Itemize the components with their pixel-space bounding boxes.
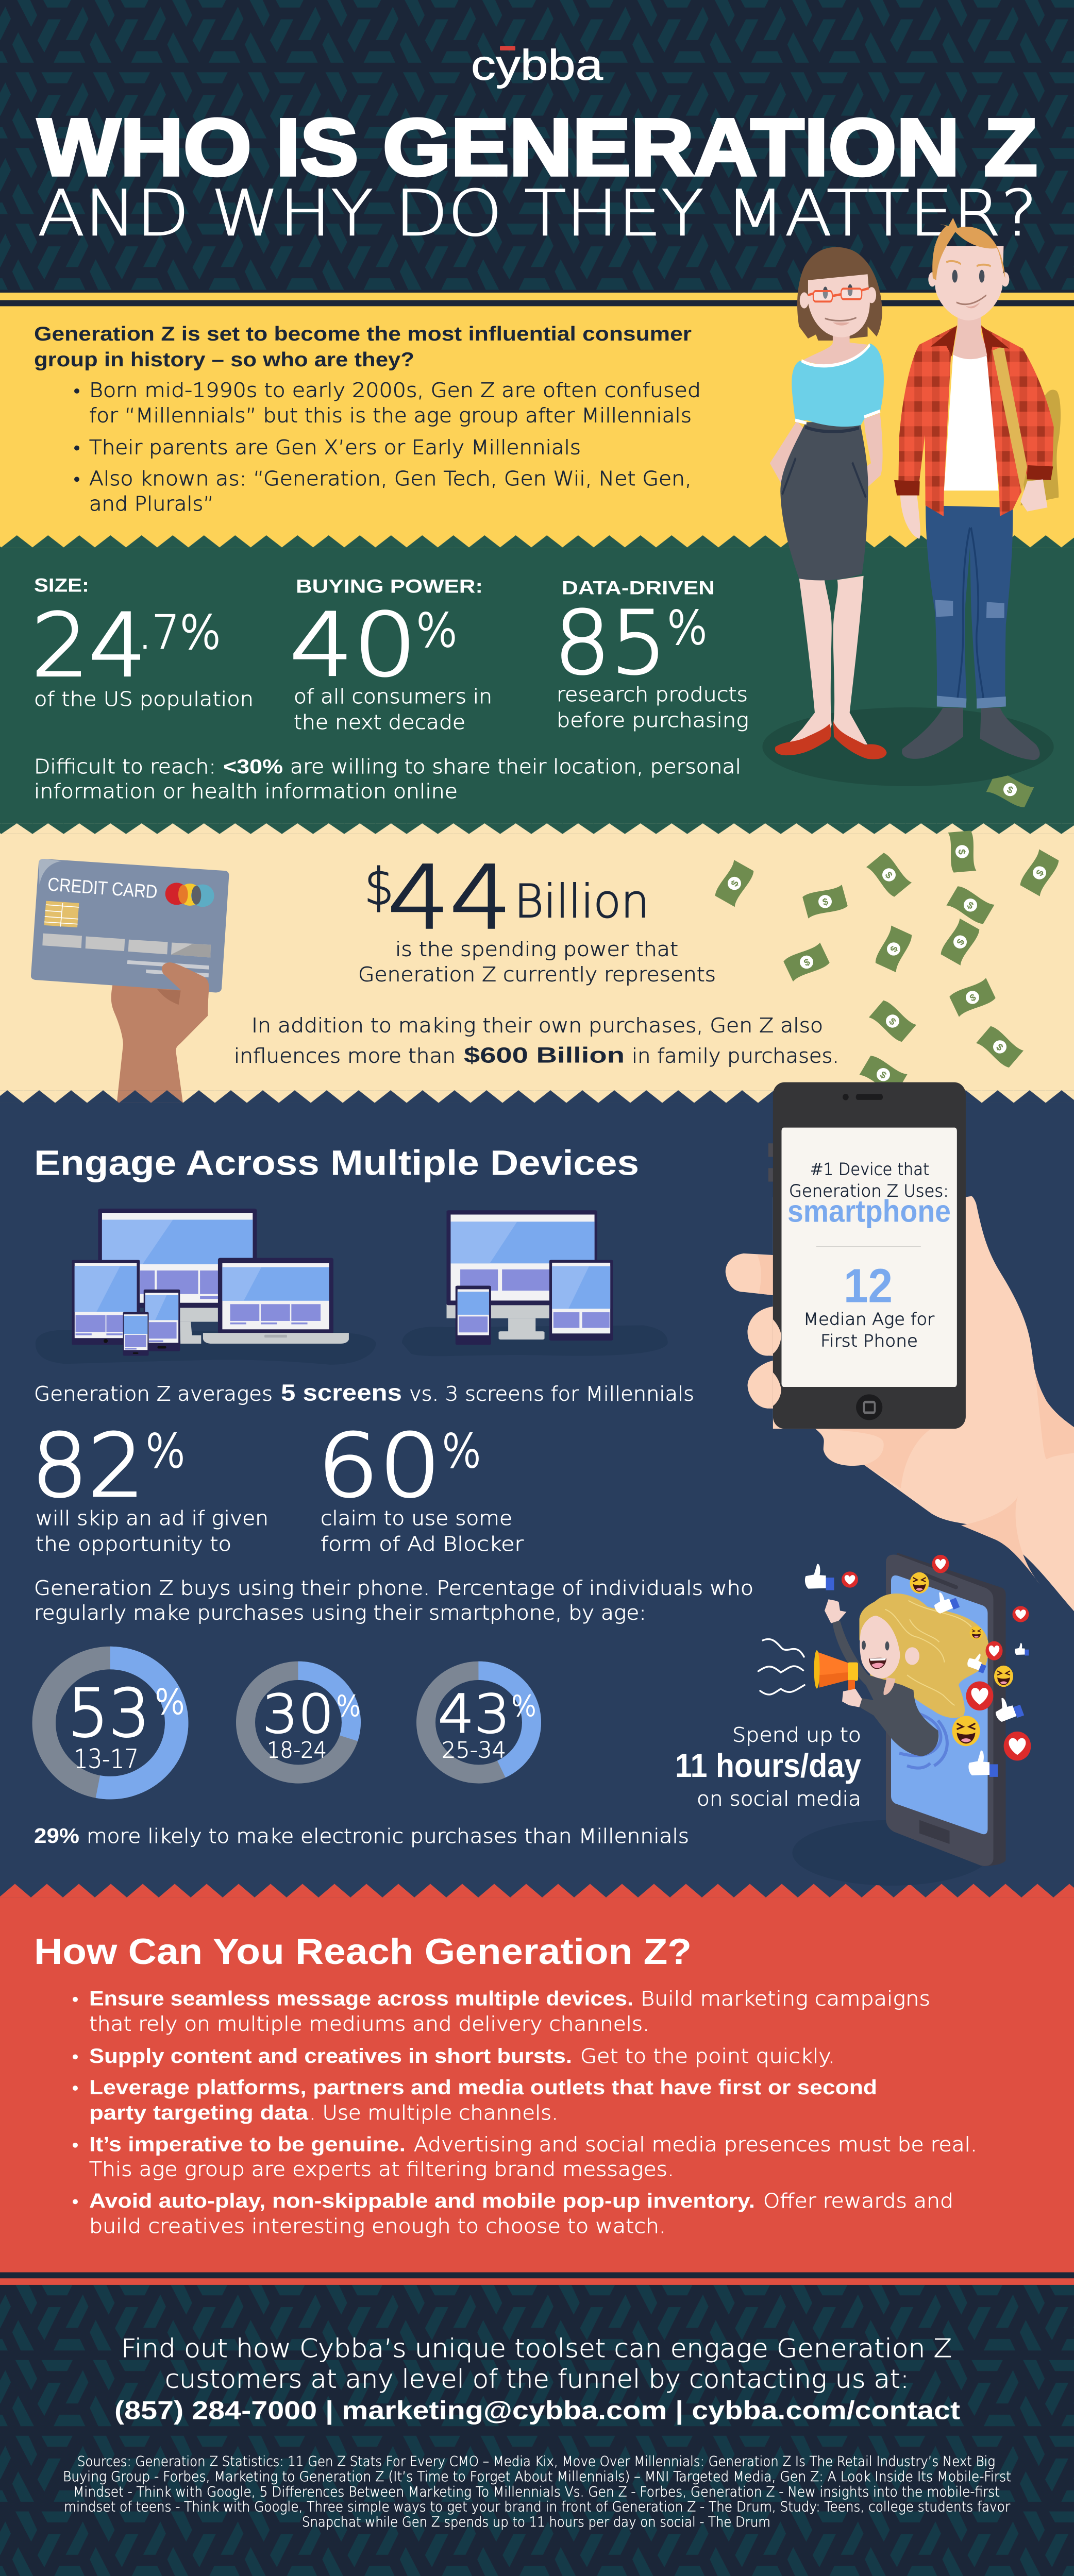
list: reach tips: . Use multiple channels. xyxy=(309,2102,558,2125)
heading: engage across devices: Engage Across Multiple Devices xyxy=(34,1143,639,1182)
text block: 44 billion xyxy=(358,848,716,987)
icons: social reactions xyxy=(805,1555,1031,1777)
text block: who are they: and Plurals” xyxy=(89,493,214,516)
icons: falling money: $ xyxy=(1034,868,1046,878)
chart: donut 13-17: 53 xyxy=(68,1676,150,1752)
icons: falling money: $ xyxy=(994,1041,1005,1053)
text: 11 hours per day: 11 hours/day xyxy=(675,1747,861,1784)
text block: who are they: for “Millennials” but this is the age group after Millennials xyxy=(89,404,692,428)
icons: falling money: $ xyxy=(883,870,895,881)
list: reach tips: This age group are experts at filtering brand messages. xyxy=(89,2158,674,2181)
text block: who are they: Born mid-1990s to early 2000s, Gen Z are often confused xyxy=(89,379,701,402)
list: reach tips: that rely on multiple mediums and delivery channels. xyxy=(89,2013,649,2036)
logo: cybba: cybba xyxy=(471,42,603,89)
background: footer pattern xyxy=(0,2272,1074,2576)
text: buys using phone: regularly make purchases using their smartphone, by age: xyxy=(34,1602,646,1624)
icons: falling money: $ xyxy=(1005,784,1015,796)
chart: donut 25-34 xyxy=(426,1671,536,1774)
text: contact call to action xyxy=(114,2333,960,2425)
text: buys using phone xyxy=(34,1577,753,1624)
icon: credit card: CREDIT CARD xyxy=(47,874,158,903)
list: reach tips: Leverage platforms, partners and media outlets that have first or second xyxy=(89,2075,877,2099)
text: buys using phone: Generation Z buys using their phone. Percentage of individuals who xyxy=(34,1577,753,1600)
list: reach tips: Supply content and creatives in short bursts. xyxy=(89,2044,572,2067)
woman xyxy=(770,247,887,759)
text block: 44 billion: Billion xyxy=(514,875,649,928)
list: reach tips: Offer rewards and xyxy=(763,2190,953,2213)
icons: falling money: $ xyxy=(729,878,741,888)
text: sources xyxy=(63,2454,1011,2530)
stat: size: 24 xyxy=(31,596,146,697)
stat: size xyxy=(31,574,254,711)
illustration: two Gen Z characters xyxy=(762,218,1061,786)
icons: falling money: $ xyxy=(965,900,976,911)
text: phone screen: Median Age for xyxy=(803,1310,935,1329)
text: five screens comparison: Generation Z averages xyxy=(34,1383,273,1405)
stat: data-driven: % xyxy=(667,601,708,655)
chart: donut 18-24: 18-24 xyxy=(267,1738,327,1764)
text block: difficult to reach xyxy=(34,756,741,803)
text: phone screen xyxy=(787,1160,951,1351)
text block: who are they: group in history – so who are they? xyxy=(34,348,414,371)
icons: falling money: $ xyxy=(878,1069,888,1081)
stat: buying power: % xyxy=(416,603,458,657)
stat: buying power xyxy=(290,575,492,734)
stat: data-driven: research products xyxy=(557,684,748,706)
text block: 44 billion: 44 xyxy=(388,848,512,948)
stat: skip ad: % xyxy=(145,1425,186,1478)
panel: yellow intro background xyxy=(0,293,1074,547)
stat: size: SIZE: xyxy=(34,574,89,596)
panel: green stats background xyxy=(0,535,1074,834)
illustration: hand holding smartphone xyxy=(726,1082,1074,1611)
text block: 600 billion: $600 Billion xyxy=(464,1043,625,1067)
stat: ad blocker: claim to use some xyxy=(321,1507,512,1530)
stat: ad blocker xyxy=(317,1416,524,1556)
text block: who are they xyxy=(34,323,701,516)
text: five screens comparison: 5 screens xyxy=(281,1380,402,1405)
text: 29 percent: 29% xyxy=(34,1824,79,1848)
icon: five screens xyxy=(36,1209,376,1365)
icons: falling money: $ xyxy=(956,849,968,855)
stat: buying power: 40 xyxy=(290,595,417,696)
title xyxy=(38,102,1037,250)
chart: donut 18-24: % xyxy=(336,1690,361,1723)
list: reach tips: Advertising and social media presences must be real. xyxy=(414,2133,977,2156)
text: sources: Buying Group - Forbes, Marketing to Generation Z (It’s Time to Forget About Millennials) – MNI Targeted Media, Gen Z: A Look Inside Its Mobile-First xyxy=(63,2469,1011,2485)
background: header pattern xyxy=(0,0,1074,303)
icon: three screens xyxy=(402,1210,668,1356)
text: five screens comparison: vs. 3 screens for Millennials xyxy=(409,1383,694,1405)
panel: cream spending background xyxy=(0,823,1074,1103)
list: reach tips: build creatives interesting enough to choose to watch. xyxy=(89,2215,666,2238)
text block: difficult to reach: Difficult to reach: xyxy=(34,756,216,778)
stat: size: .7% xyxy=(138,605,221,659)
icons: falling money: $ xyxy=(887,1015,898,1027)
chart: donut 25-34: 25-34 xyxy=(442,1738,506,1764)
chart: donut 18-24 xyxy=(245,1671,361,1774)
text: five screens comparison xyxy=(34,1380,694,1405)
text: phone screen: First Phone xyxy=(820,1331,918,1351)
stat: ad blocker: % xyxy=(442,1425,481,1478)
text block: 600 billion xyxy=(234,1014,839,1067)
text block: difficult to reach: <30% xyxy=(223,756,283,778)
text: contact call to action: (857) 284-7000 | marketing@cybba.com | cybba.com/contact xyxy=(114,2396,960,2425)
text: sources: Snapchat while Gen Z spends up to 11 hours per day on social - The Drum xyxy=(302,2514,770,2530)
text: phone screen: Generation Z Uses: xyxy=(789,1181,949,1201)
list: reach tips: Get to the point quickly. xyxy=(580,2045,835,2068)
chart: donut 25-34: % xyxy=(511,1690,536,1723)
stat: skip ad xyxy=(31,1416,268,1556)
stat: skip ad: 82 xyxy=(31,1416,144,1517)
text block: who are they: Generation Z is set to become the most influential consumer xyxy=(34,323,692,345)
text: sources: Sources: Generation Z Statistics: 11 Gen Z Stats For Every CMO – Media Kix, Move Over Millennials: Generation Z Is The Retail Industry’s Next Big xyxy=(77,2454,995,2469)
text block: difficult to reach: are willing to share their location, personal xyxy=(290,756,741,778)
text: phone screen: #1 Device that xyxy=(810,1160,929,1179)
title: WHO IS GENERATION Z xyxy=(38,102,1037,192)
stat: data-driven: DATA-DRIVEN xyxy=(562,577,715,598)
text block: who are they: Their parents are Gen X’ers or Early Millennials xyxy=(89,436,581,459)
stat: buying power: of all consumers in xyxy=(294,685,492,708)
list: reach tips: Ensure seamless message across multiple devices. xyxy=(89,1987,633,2010)
chart: donut 18-24: 30 xyxy=(262,1684,334,1745)
text: phone screen: 12 xyxy=(844,1259,893,1312)
stat: ad blocker: form of Ad Blocker xyxy=(321,1533,524,1556)
icon: credit card xyxy=(31,859,229,1005)
text: 11 hours per day: Spend up to xyxy=(732,1724,861,1747)
stat: data-driven: before purchasing xyxy=(557,709,749,732)
title: AND WHY DO THEY MATTER? xyxy=(38,177,1037,250)
icons: falling money: $ xyxy=(968,991,978,1004)
text block: who are they: Also known as: “Generation, Gen Tech, Gen Wii, Net Gen, xyxy=(89,467,692,490)
icons: falling money: $ xyxy=(954,937,967,947)
text block: 44 billion: is the spending power that xyxy=(395,938,678,961)
stat: skip ad: will skip an ad if given xyxy=(36,1507,268,1530)
stat: data-driven xyxy=(554,577,749,732)
text: sources: mindset of teens - Think with Google, Three simple ways to get your brand in front of Generation Z - The Drum, Study: Teens, college students favor xyxy=(64,2499,1010,2515)
icon: hand behind credit card xyxy=(111,980,209,1103)
panel: red reach background xyxy=(0,1884,1074,2272)
chart: donut 13-17: 13-17 xyxy=(74,1744,139,1774)
text: 29 percent: more likely to make electronic purchases than Millennials xyxy=(87,1825,689,1848)
man xyxy=(894,218,1061,760)
ground shadow xyxy=(762,707,1054,786)
text block: 44 billion: Generation Z currently represents xyxy=(358,963,716,987)
icons: falling money: $ xyxy=(888,944,900,954)
stat: data-driven: 85 xyxy=(554,593,667,694)
text block: 600 billion: in family purchases. xyxy=(632,1045,839,1067)
stat: ad blocker: 60 xyxy=(317,1416,441,1517)
text: sources: Mindset - Think with Google, 5 Differences Between Marketing To Millennials Vs. Gen Z - Forbes, Generation Z - New insights into the mobile-first xyxy=(73,2484,1000,2500)
text: contact call to action: Find out how Cybba’s unique toolset can engage Generation Z xyxy=(121,2333,952,2363)
chart: donut 13-17: % xyxy=(155,1682,185,1722)
stat: buying power: BUYING POWER: xyxy=(296,575,483,597)
chart: donut 13-17 xyxy=(44,1658,185,1788)
panel: navy devices background xyxy=(0,1090,1074,1897)
icons: falling money xyxy=(713,770,1061,1095)
stat: size: of the US population xyxy=(34,688,254,711)
list: reach tips xyxy=(73,1987,977,2238)
text: 11 hours per day xyxy=(675,1724,861,1811)
icons: falling money: $ xyxy=(821,896,830,908)
list: reach tips: party targeting data xyxy=(89,2100,308,2124)
text: 11 hours per day: on social media xyxy=(697,1788,861,1811)
icons: falling money: $ xyxy=(802,956,812,968)
chart: donut 25-34: 43 xyxy=(438,1684,510,1745)
text block: 44 billion: $ xyxy=(364,858,394,917)
heading: how can you reach: How Can You Reach Generation Z? xyxy=(34,1931,692,1972)
text block: difficult to reach: information or health information online xyxy=(34,781,458,803)
stat: buying power: the next decade xyxy=(294,711,465,734)
list: reach tips: It’s imperative to be genuine. xyxy=(89,2132,406,2156)
text: phone screen: smartphone xyxy=(787,1194,951,1229)
illustration: girl with megaphone bursting from phone xyxy=(759,1553,1031,1886)
text: contact call to action: customers at any level of the funnel by contacting us at: xyxy=(165,2364,909,2394)
list: reach tips: Avoid auto-play, non-skippable and mobile pop-up inventory. xyxy=(89,2189,755,2212)
text block: 600 billion: influences more than xyxy=(234,1045,456,1067)
list: reach tips: Build marketing campaigns xyxy=(641,1988,930,2010)
text block: 600 billion: In addition to making their own purchases, Gen Z also xyxy=(251,1014,823,1037)
stat: skip ad: the opportunity to xyxy=(36,1533,231,1556)
